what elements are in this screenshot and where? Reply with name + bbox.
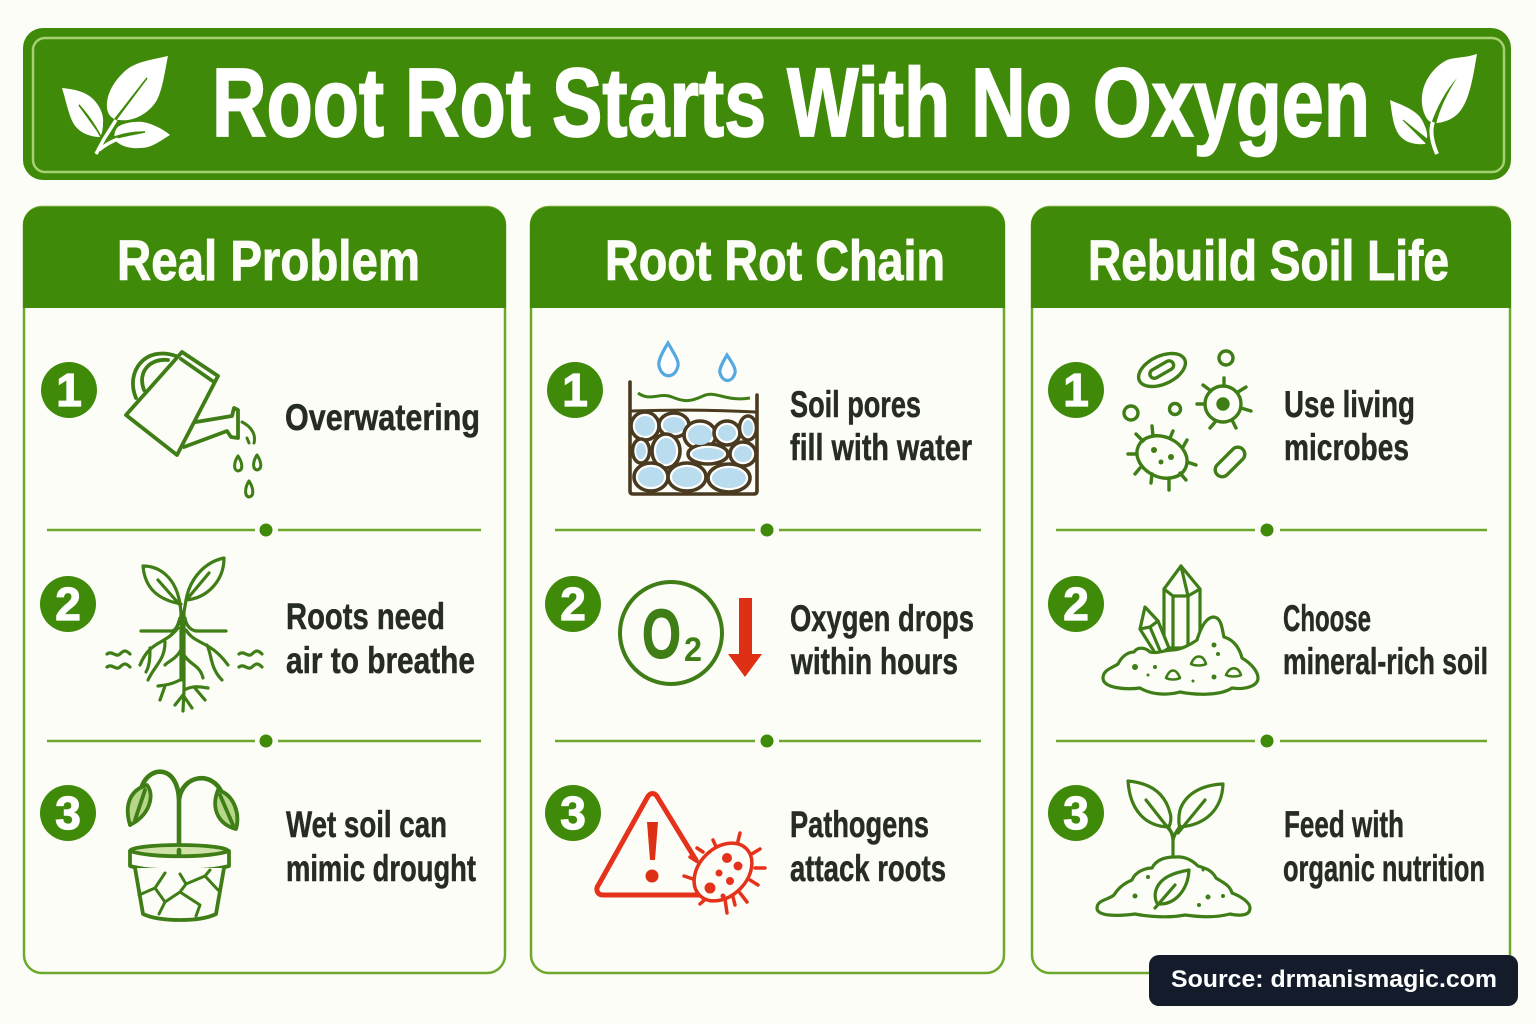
item 1 soil pores: fill with water <box>790 427 972 468</box>
item 1 microbes: microbes <box>1284 427 1409 468</box>
icon: oxygen dropping: O <box>642 595 681 673</box>
item 1 microbes: 1 <box>1063 364 1089 416</box>
heading: Root Rot Chain <box>605 229 945 293</box>
item 2 oxygen: 2 <box>560 578 586 630</box>
item 1 microbes <box>1048 347 1415 490</box>
item 1 soil pores <box>547 343 972 494</box>
item 2 oxygen: Oxygen drops <box>790 598 974 639</box>
icon: right leaves <box>1390 54 1477 154</box>
source badge <box>1149 955 1518 1006</box>
item 3 pathogens: Pathogens <box>790 804 929 845</box>
item 3 wet soil: 3 <box>55 787 81 839</box>
item 2 mineral soil: 2 <box>1063 578 1089 630</box>
item 3 wet soil: Wet soil can <box>286 804 447 845</box>
icon: watering can <box>126 352 261 497</box>
item 2 mineral soil <box>1048 566 1488 694</box>
icon: left leaves <box>62 56 170 154</box>
source badge: Source: drmanismagic.com <box>1171 966 1497 993</box>
item 2 mineral soil: Choose <box>1283 598 1371 639</box>
item 2 roots need air: air to breathe <box>286 640 475 681</box>
item 1 overwatering: 1 <box>56 364 82 416</box>
item 3 pathogens <box>545 785 946 913</box>
item 2 roots need air <box>40 558 475 711</box>
icon: oxygen dropping <box>620 582 762 684</box>
panel: root rot chain <box>530 207 1005 973</box>
item 1 overwatering: Overwatering <box>285 397 480 438</box>
heading: Real Problem <box>117 229 420 293</box>
item 3 pathogens: 3 <box>560 787 586 839</box>
panel header <box>1031 207 1511 308</box>
icon: plant roots <box>107 558 262 711</box>
item 3 wet soil: mimic drought <box>286 848 476 889</box>
item 2 roots need air: 2 <box>55 578 81 630</box>
heading: Rebuild Soil Life <box>1088 229 1449 293</box>
item 3 organic nutrition: 3 <box>1063 787 1089 839</box>
item 1 soil pores: 1 <box>562 364 588 416</box>
item 2 roots need air: Roots need <box>286 596 445 637</box>
title banner <box>23 28 1511 180</box>
panel: real problem <box>23 207 506 973</box>
item 1 microbes: Use living <box>1284 384 1415 425</box>
icon: warning and pathogen <box>597 794 765 913</box>
item 1 overwatering <box>41 352 480 497</box>
panel header <box>530 207 1005 308</box>
panel header <box>23 207 506 308</box>
icon: crystals on soil <box>1103 566 1258 694</box>
item 1 soil pores: Soil pores <box>790 384 921 425</box>
item 3 organic nutrition <box>1048 781 1485 917</box>
item 2 oxygen <box>545 576 974 684</box>
item 3 wet soil <box>40 772 476 920</box>
icon: drooping plant in pot <box>128 772 237 920</box>
icon: seedling on soil <box>1097 781 1250 917</box>
panel: rebuild soil life <box>1031 207 1511 973</box>
icon: oxygen dropping: 2 <box>684 631 702 669</box>
item 3 pathogens: attack roots <box>790 848 946 889</box>
item 3 organic nutrition: Feed with <box>1284 804 1404 845</box>
icon: microbes <box>1124 347 1251 490</box>
item 2 oxygen: within hours <box>790 641 958 682</box>
icon: soil with water <box>630 343 757 494</box>
